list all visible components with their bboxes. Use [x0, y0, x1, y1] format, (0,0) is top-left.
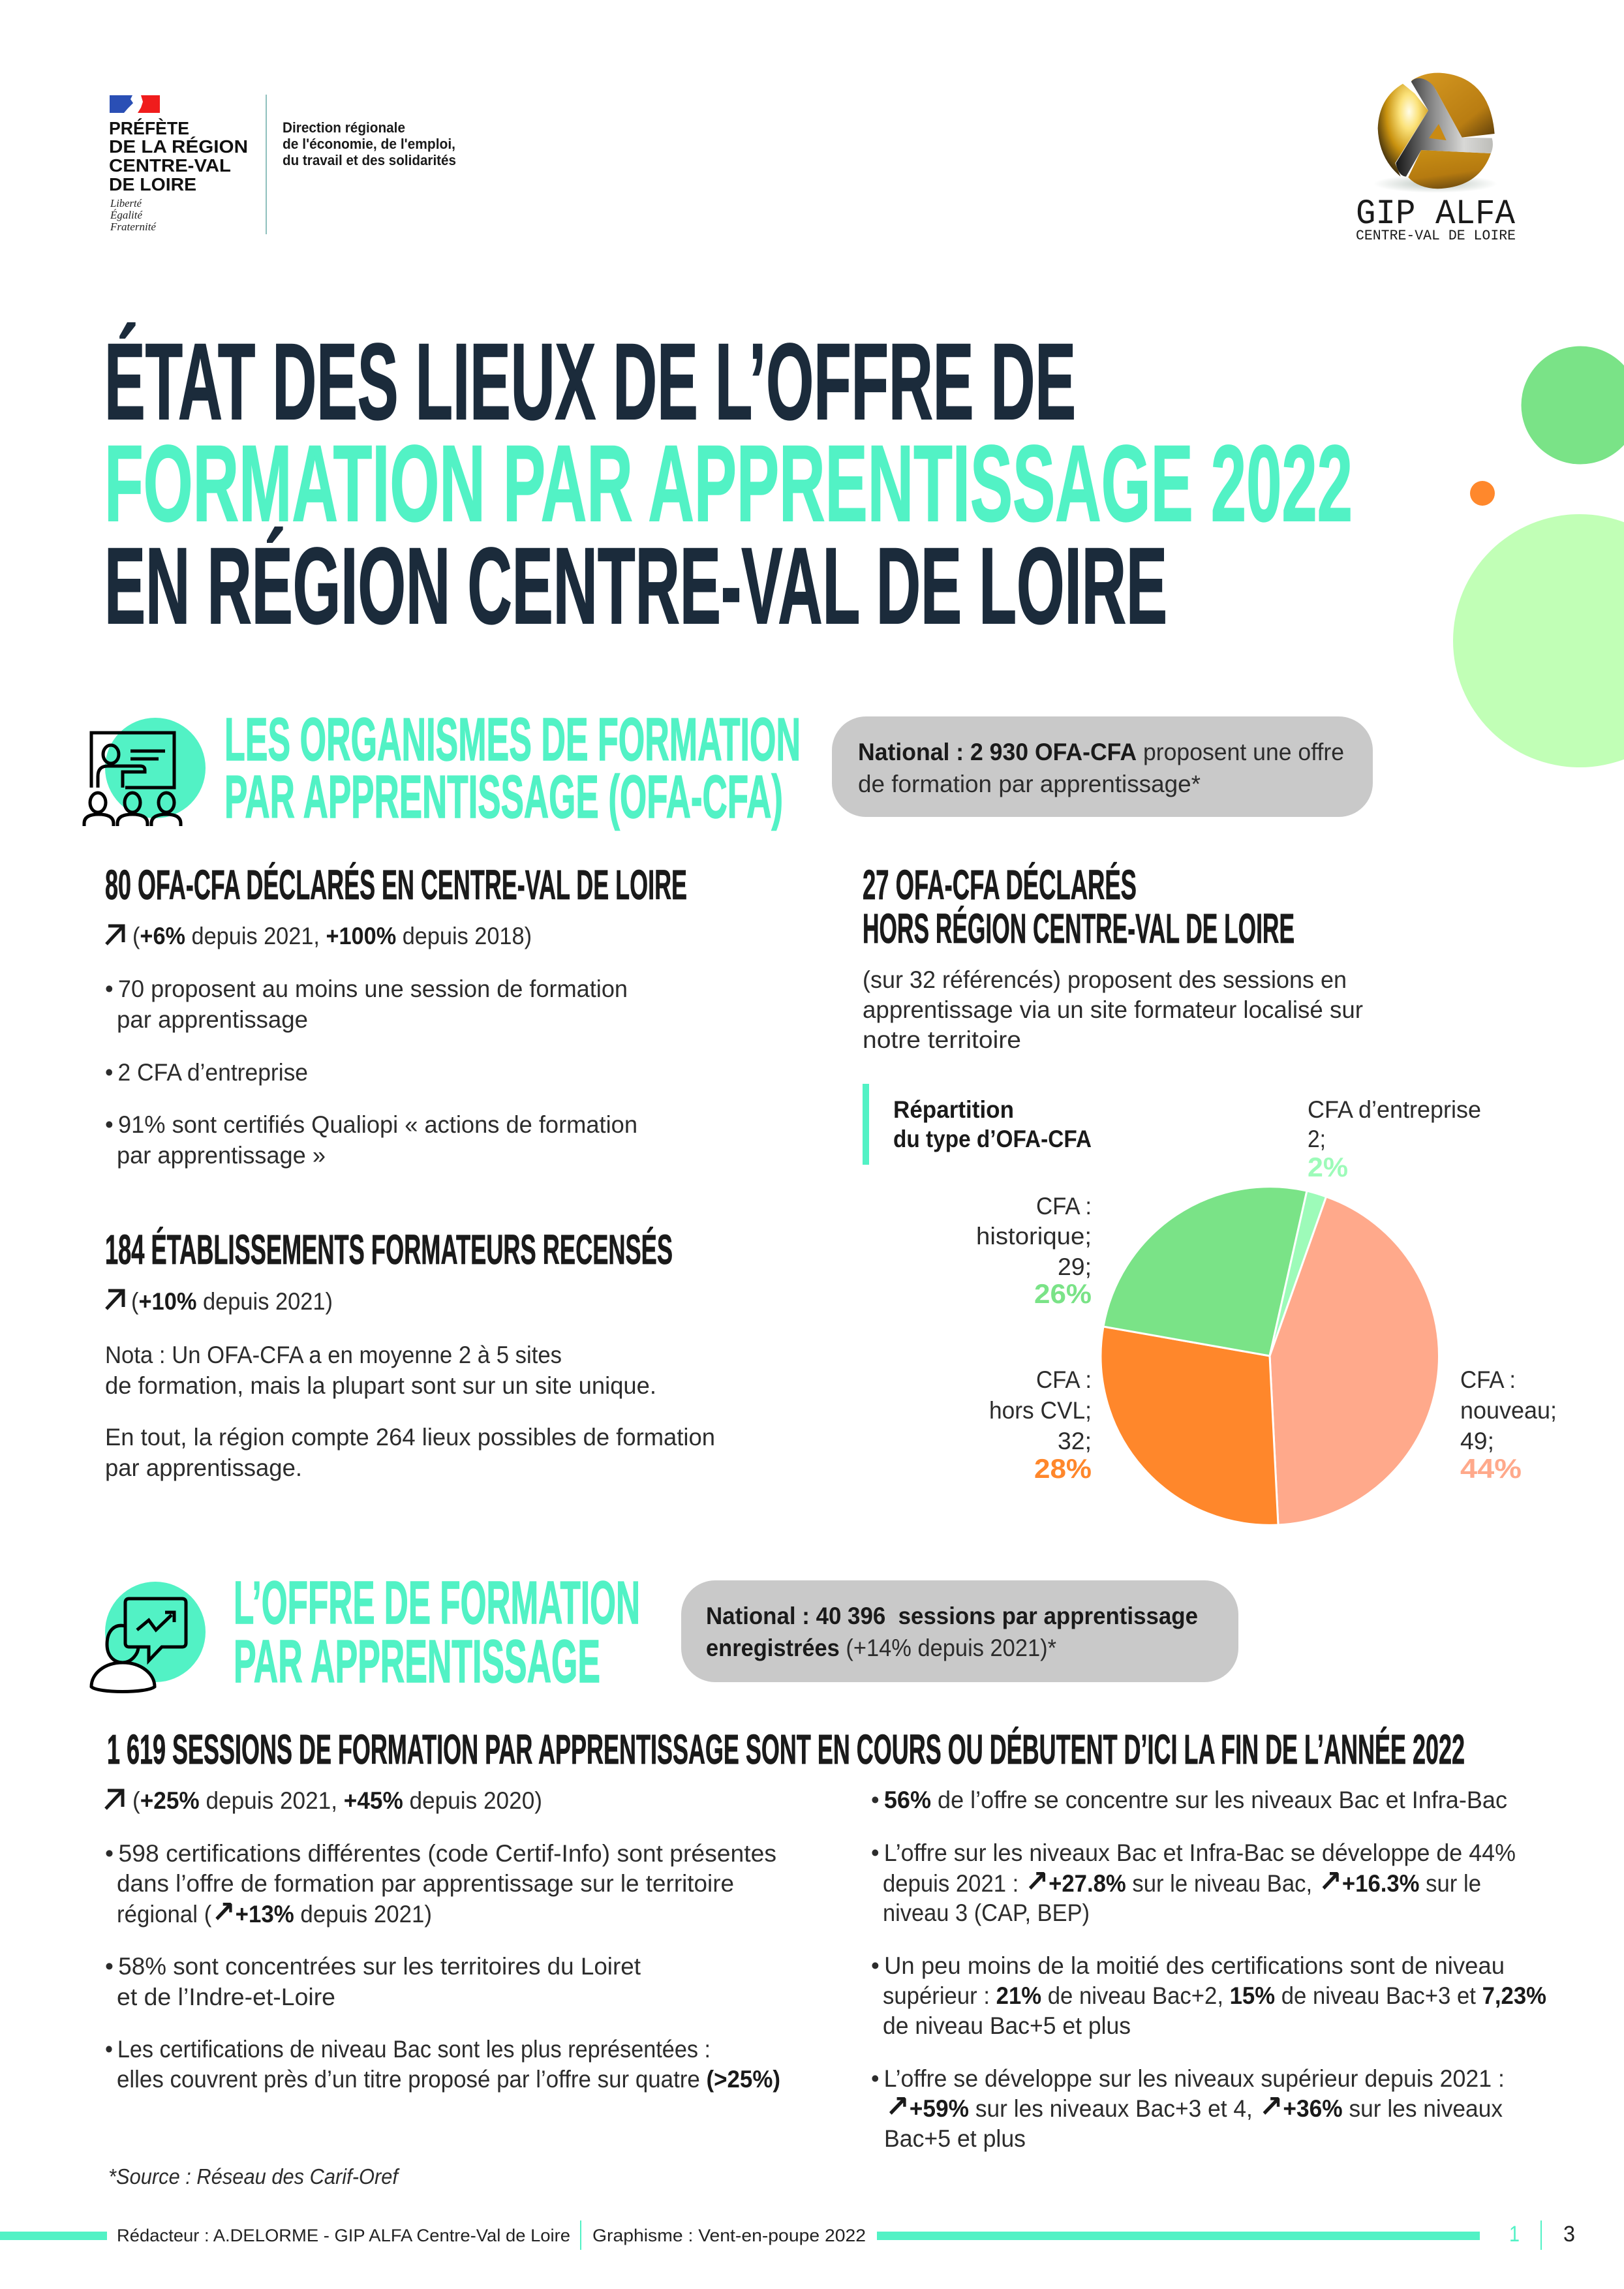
heading: 27 OFA-CFA DÉCLARÉS: [863, 861, 1137, 908]
bullet: certifications: • 598 certifications différentes (code Certif-Info) sont présentes: [105, 1840, 776, 1867]
chart title: Répartition: [893, 1096, 1014, 1123]
bullets: • 2 CFA d’entreprise: [105, 1059, 308, 1086]
bullets: [105, 976, 637, 1169]
description: [863, 966, 1363, 1053]
bullet: niveau supérieur: • Un peu moins de la moitié des certifications sont de niveau: [871, 1952, 1505, 1979]
bullet: niveau Bac: elles couvrent près d’un titre proposé par l’offre sur quatre (>25%): [117, 2066, 780, 2093]
block: 80 OFA-CFA: [105, 861, 687, 1169]
title: [104, 322, 1353, 647]
direction name: [283, 119, 456, 168]
chart label: historique: historique;: [976, 1223, 1092, 1250]
left column: [105, 1787, 780, 2093]
bullet: développement: [871, 2065, 1505, 2152]
bullet: 44%: depuis 2021 : ↗+27.8% sur le niveau Bac, ↗+16.3% sur le: [883, 1864, 1481, 1899]
chart label: CFA d'entreprise: [1308, 1096, 1481, 1182]
heading: 80 OFA-CFA DÉCLARÉS EN CENTRE-VAL DE LOIRE: [105, 861, 687, 908]
description: (sur 32 référencés) proposent des sessions en: [863, 966, 1347, 993]
credits: Rédacteur : A.DELORME - GIP ALFA Centre-Val de Loire: [117, 2226, 570, 2245]
chart label: hors CVL: hors CVL;: [989, 1397, 1092, 1424]
chart title: [863, 1084, 1092, 1165]
right column: [871, 1787, 1546, 2152]
section heading: offre: L’OFFRE DE FORMATION: [234, 1569, 640, 1636]
bullet: développement: Bac+5 et plus: [884, 2125, 1026, 2152]
footer: [0, 2220, 1575, 2250]
decorative circle: pale green: [1453, 514, 1624, 767]
chart label: hors CVL: CFA :: [1036, 1366, 1092, 1393]
chart label: nouveau: 49;: [1460, 1428, 1494, 1454]
notes: de formation, mais la plupart sont sur un site unique.: [105, 1372, 656, 1399]
bullet: niveau supérieur: de niveau Bac+5 et plus: [883, 2012, 1131, 2039]
block: 184 établissements: [105, 1226, 715, 1481]
chart label: hors CVL: 32;: [1058, 1428, 1092, 1454]
chart title: du type d’OFA-CFA: [893, 1126, 1092, 1152]
logo wordmark: CENTRE-VAL DE LOIRE: [1356, 228, 1516, 244]
bullet: certifications: régional (↗+13% depuis 2021): [117, 1894, 432, 1929]
page number: [1509, 2220, 1575, 2250]
direction name: Direction régionale: [283, 119, 405, 136]
logo wordmark: CENTRE-VAL: [109, 155, 231, 176]
bullet: 44%: • L’offre sur les niveaux Bac et Infra-Bac se développe de 44%: [871, 1839, 1516, 1866]
bullet: niveau Bac: [105, 2036, 780, 2093]
chart label: nouveau: [1460, 1366, 1557, 1484]
chart label: nouveau: nouveau;: [1460, 1397, 1557, 1424]
bullet: territoires: • 58% sont concentrées sur les territoires du Loiret: [105, 1953, 641, 1980]
callout: national sessions: enregistrées (+14% depuis 2021)*: [706, 1635, 1056, 1661]
bullet: développement: ↗+59% sur les niveaux Bac+3 et 4, ↗+36% sur les niveaux: [885, 2089, 1503, 2124]
bullets: • 70 proposent au moins une session de formation: [105, 976, 628, 1002]
logo wordmark: [109, 118, 248, 194]
chart label: historique: 29;: [1058, 1253, 1092, 1280]
bullet: 44%: [871, 1839, 1516, 1926]
icon: golden sphere: [1373, 73, 1497, 193]
motto: Égalité: [110, 209, 143, 221]
logo wordmark: DE LOIRE: [109, 174, 196, 194]
decorative circle: orange: [1470, 481, 1495, 506]
logo: Préfète de la région Centre-Val de Loire: [109, 95, 456, 234]
source note: *Source : Réseau des Carif-Oref: [108, 2164, 401, 2189]
bullet: développement: • L’offre se développe sur les niveaux supérieur depuis 2021 :: [871, 2065, 1505, 2092]
page number: 3: [1563, 2222, 1575, 2247]
bullet: territoires: [105, 1953, 641, 2010]
pie chart: [1101, 1187, 1439, 1525]
direction name: de l'économie, de l'emploi,: [283, 136, 455, 152]
callout: national OFA-CFA: National : 2 930 OFA-CFA proposent une offre: [858, 739, 1344, 765]
section heading: organismes: LES ORGANISMES DE FORMATION: [224, 705, 801, 773]
notes: par apprentissage.: [105, 1454, 302, 1481]
notes: Nota : Un OFA-CFA a en moyenne 2 à 5 sites: [105, 1342, 562, 1368]
logo wordmark: DE LA RÉGION: [109, 136, 248, 157]
bullet: 44%: niveau 3 (CAP, BEP): [883, 1899, 1090, 1926]
trend: (+25% depuis 2021, +45% depuis 2020): [132, 1787, 542, 1814]
callout: national sessions: National : 40 396 sessions par apprentissage: [706, 1603, 1198, 1629]
slice: hors CVL: [1101, 1327, 1278, 1525]
section heading: organismes: [224, 705, 801, 831]
chart label: nouveau: CFA :: [1460, 1366, 1516, 1393]
description: notre territoire: [863, 1026, 1021, 1053]
icon: up arrow: [106, 926, 123, 944]
trend: (+6% depuis 2021, +100% depuis 2018): [132, 923, 532, 949]
bullet: certifications: dans l’offre de formation par apprentissage sur le territoire: [117, 1870, 734, 1897]
icon: French flag: [110, 95, 160, 113]
bullet: niveau Bac: • Les certifications de niveau Bac sont les plus représentées :: [105, 2036, 711, 2063]
description: apprentissage via un site formateur localisé sur: [863, 996, 1363, 1023]
chart label: historique: CFA :: [1036, 1193, 1092, 1220]
notes: En tout, la région compte 264 lieux possibles de formation: [105, 1424, 715, 1451]
section heading: organismes: PAR APPRENTISSAGE (OFA-CFA): [224, 763, 783, 831]
chart label: historique: [976, 1193, 1092, 1309]
logo wordmark: GIP ALFA: [1356, 194, 1516, 234]
chart label: CFA d'entreprise: CFA d’entreprise: [1308, 1096, 1481, 1123]
callout: national OFA-CFA: de formation par apprentissage*: [858, 771, 1201, 797]
bullet: 56%: • 56% de l’offre se concentre sur les niveaux Bac et Infra-Bac: [871, 1787, 1507, 1813]
bullet: niveau supérieur: supérieur : 21% de niveau Bac+2, 15% de niveau Bac+3 et 7,23%: [883, 1982, 1546, 2009]
bullets: • 91% sont certifiés Qualiopi « actions de formation: [105, 1111, 637, 1138]
icon: person with chart bubble: [91, 1582, 206, 1691]
motto: Fraternité: [110, 221, 157, 233]
chart label: hors CVL: 28%: [1034, 1453, 1092, 1484]
section heading: offre: PAR APPRENTISSAGE: [234, 1627, 600, 1695]
motto: [110, 197, 157, 233]
block: 27 OFA-CFA hors région: [863, 861, 1363, 1053]
notes: [105, 1342, 715, 1481]
page number: 1: [1509, 2222, 1520, 2247]
heading: 184 ÉTABLISSEMENTS FORMATEURS RECENSÉS: [105, 1226, 673, 1273]
chart label: hors CVL: [989, 1366, 1092, 1484]
credits: Graphisme : Vent-en-poupe 2022: [592, 2226, 866, 2245]
callout: national OFA-CFA: [832, 716, 1373, 817]
icon: up arrow: [106, 1790, 123, 1809]
credits: [117, 2220, 866, 2250]
decorative circle: green: [1522, 346, 1624, 465]
chart label: historique: 26%: [1034, 1278, 1092, 1309]
heading: [863, 861, 1295, 952]
direction name: du travail et des solidarités: [283, 152, 456, 168]
slice: nouveau: [1270, 1197, 1439, 1525]
bullets: par apprentissage »: [117, 1142, 326, 1169]
logo: GIP ALFA: [1356, 73, 1516, 244]
slice: historique: [1103, 1187, 1307, 1356]
logo wordmark: PRÉFÈTE: [109, 118, 189, 138]
callout: national sessions: [681, 1580, 1238, 1682]
trend: (+10% depuis 2021): [131, 1288, 333, 1315]
section heading: offre: [234, 1569, 640, 1695]
bullet: certifications: [105, 1840, 776, 1929]
bullets: par apprentissage: [117, 1006, 308, 1033]
bullet: territoires: et de l’Indre-et-Loire: [117, 1984, 335, 2010]
bullet: niveau supérieur: [871, 1952, 1546, 2039]
motto: Liberté: [110, 197, 142, 209]
icon: up arrow: [106, 1291, 123, 1309]
chart label: nouveau: 44%: [1460, 1453, 1522, 1484]
chart label: CFA d'entreprise: 2;: [1308, 1126, 1326, 1152]
chart label: CFA d'entreprise: 2%: [1308, 1152, 1348, 1182]
icon: teaching board and audience: [84, 718, 206, 826]
heading: HORS RÉGION CENTRE-VAL DE LOIRE: [863, 905, 1295, 952]
slice: entreprise: [1270, 1191, 1326, 1356]
